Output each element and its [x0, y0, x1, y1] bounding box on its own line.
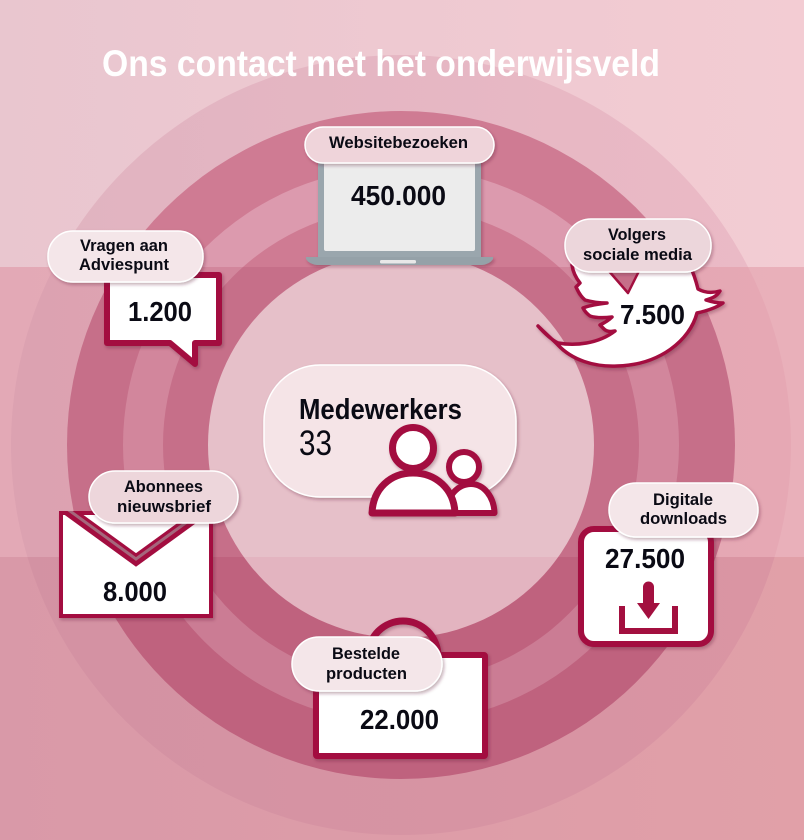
value: 7.500	[620, 299, 685, 330]
value: 1.200	[128, 296, 192, 327]
value: 450.000	[351, 180, 446, 211]
icon: envelope	[59, 503, 213, 616]
label: Volgers	[608, 225, 666, 244]
centre pill	[264, 365, 516, 497]
label: sociale media	[583, 245, 693, 264]
label pill	[305, 127, 494, 163]
label: Websitebezoeken	[329, 133, 468, 152]
label: Abonnees	[124, 477, 203, 496]
label	[117, 477, 211, 516]
panel: websitebezoeken	[305, 127, 494, 265]
icon: download box	[581, 529, 711, 644]
background: concentric rings, bottom band	[0, 557, 804, 840]
label pill	[48, 231, 203, 282]
label	[640, 490, 727, 528]
label: Adviespunt	[79, 255, 169, 274]
label: nieuwsbrief	[117, 497, 211, 516]
label: producten	[326, 664, 407, 683]
value: 22.000	[360, 704, 439, 735]
panel: volgers sociale media	[538, 219, 723, 366]
label pill	[565, 219, 711, 272]
label: Digitale	[653, 490, 713, 509]
panel: bestelde producten	[292, 621, 485, 756]
label pill	[89, 471, 238, 523]
panel: digitale downloads	[581, 483, 758, 644]
panel: medewerkers	[264, 365, 516, 513]
background: concentric rings, top band	[76, 55, 748, 267]
bird wing notch	[608, 270, 639, 293]
panel: vragen aan adviespunt	[48, 231, 219, 364]
label pill	[609, 483, 758, 537]
label	[583, 225, 693, 264]
background: concentric rings, middle band	[0, 267, 804, 557]
value: 33	[299, 424, 332, 463]
label: Bestelde	[332, 644, 400, 663]
label: downloads	[640, 509, 727, 528]
heading: Medewerkers	[299, 394, 462, 426]
label	[79, 236, 169, 274]
value: 27.500	[605, 543, 685, 574]
panel: abonnees nieuwsbrief	[59, 471, 238, 616]
icon: bird	[538, 265, 723, 366]
label: Vragen aan	[80, 236, 168, 255]
value: 8.000	[103, 576, 167, 607]
label pill	[292, 637, 442, 691]
icon: shopping bag	[316, 621, 485, 756]
icon: people	[372, 428, 494, 513]
label	[326, 644, 407, 683]
icon: laptop	[306, 155, 493, 265]
title: Ons contact met het onderwijsveld	[102, 43, 660, 84]
icon: speech bubble	[107, 275, 219, 364]
